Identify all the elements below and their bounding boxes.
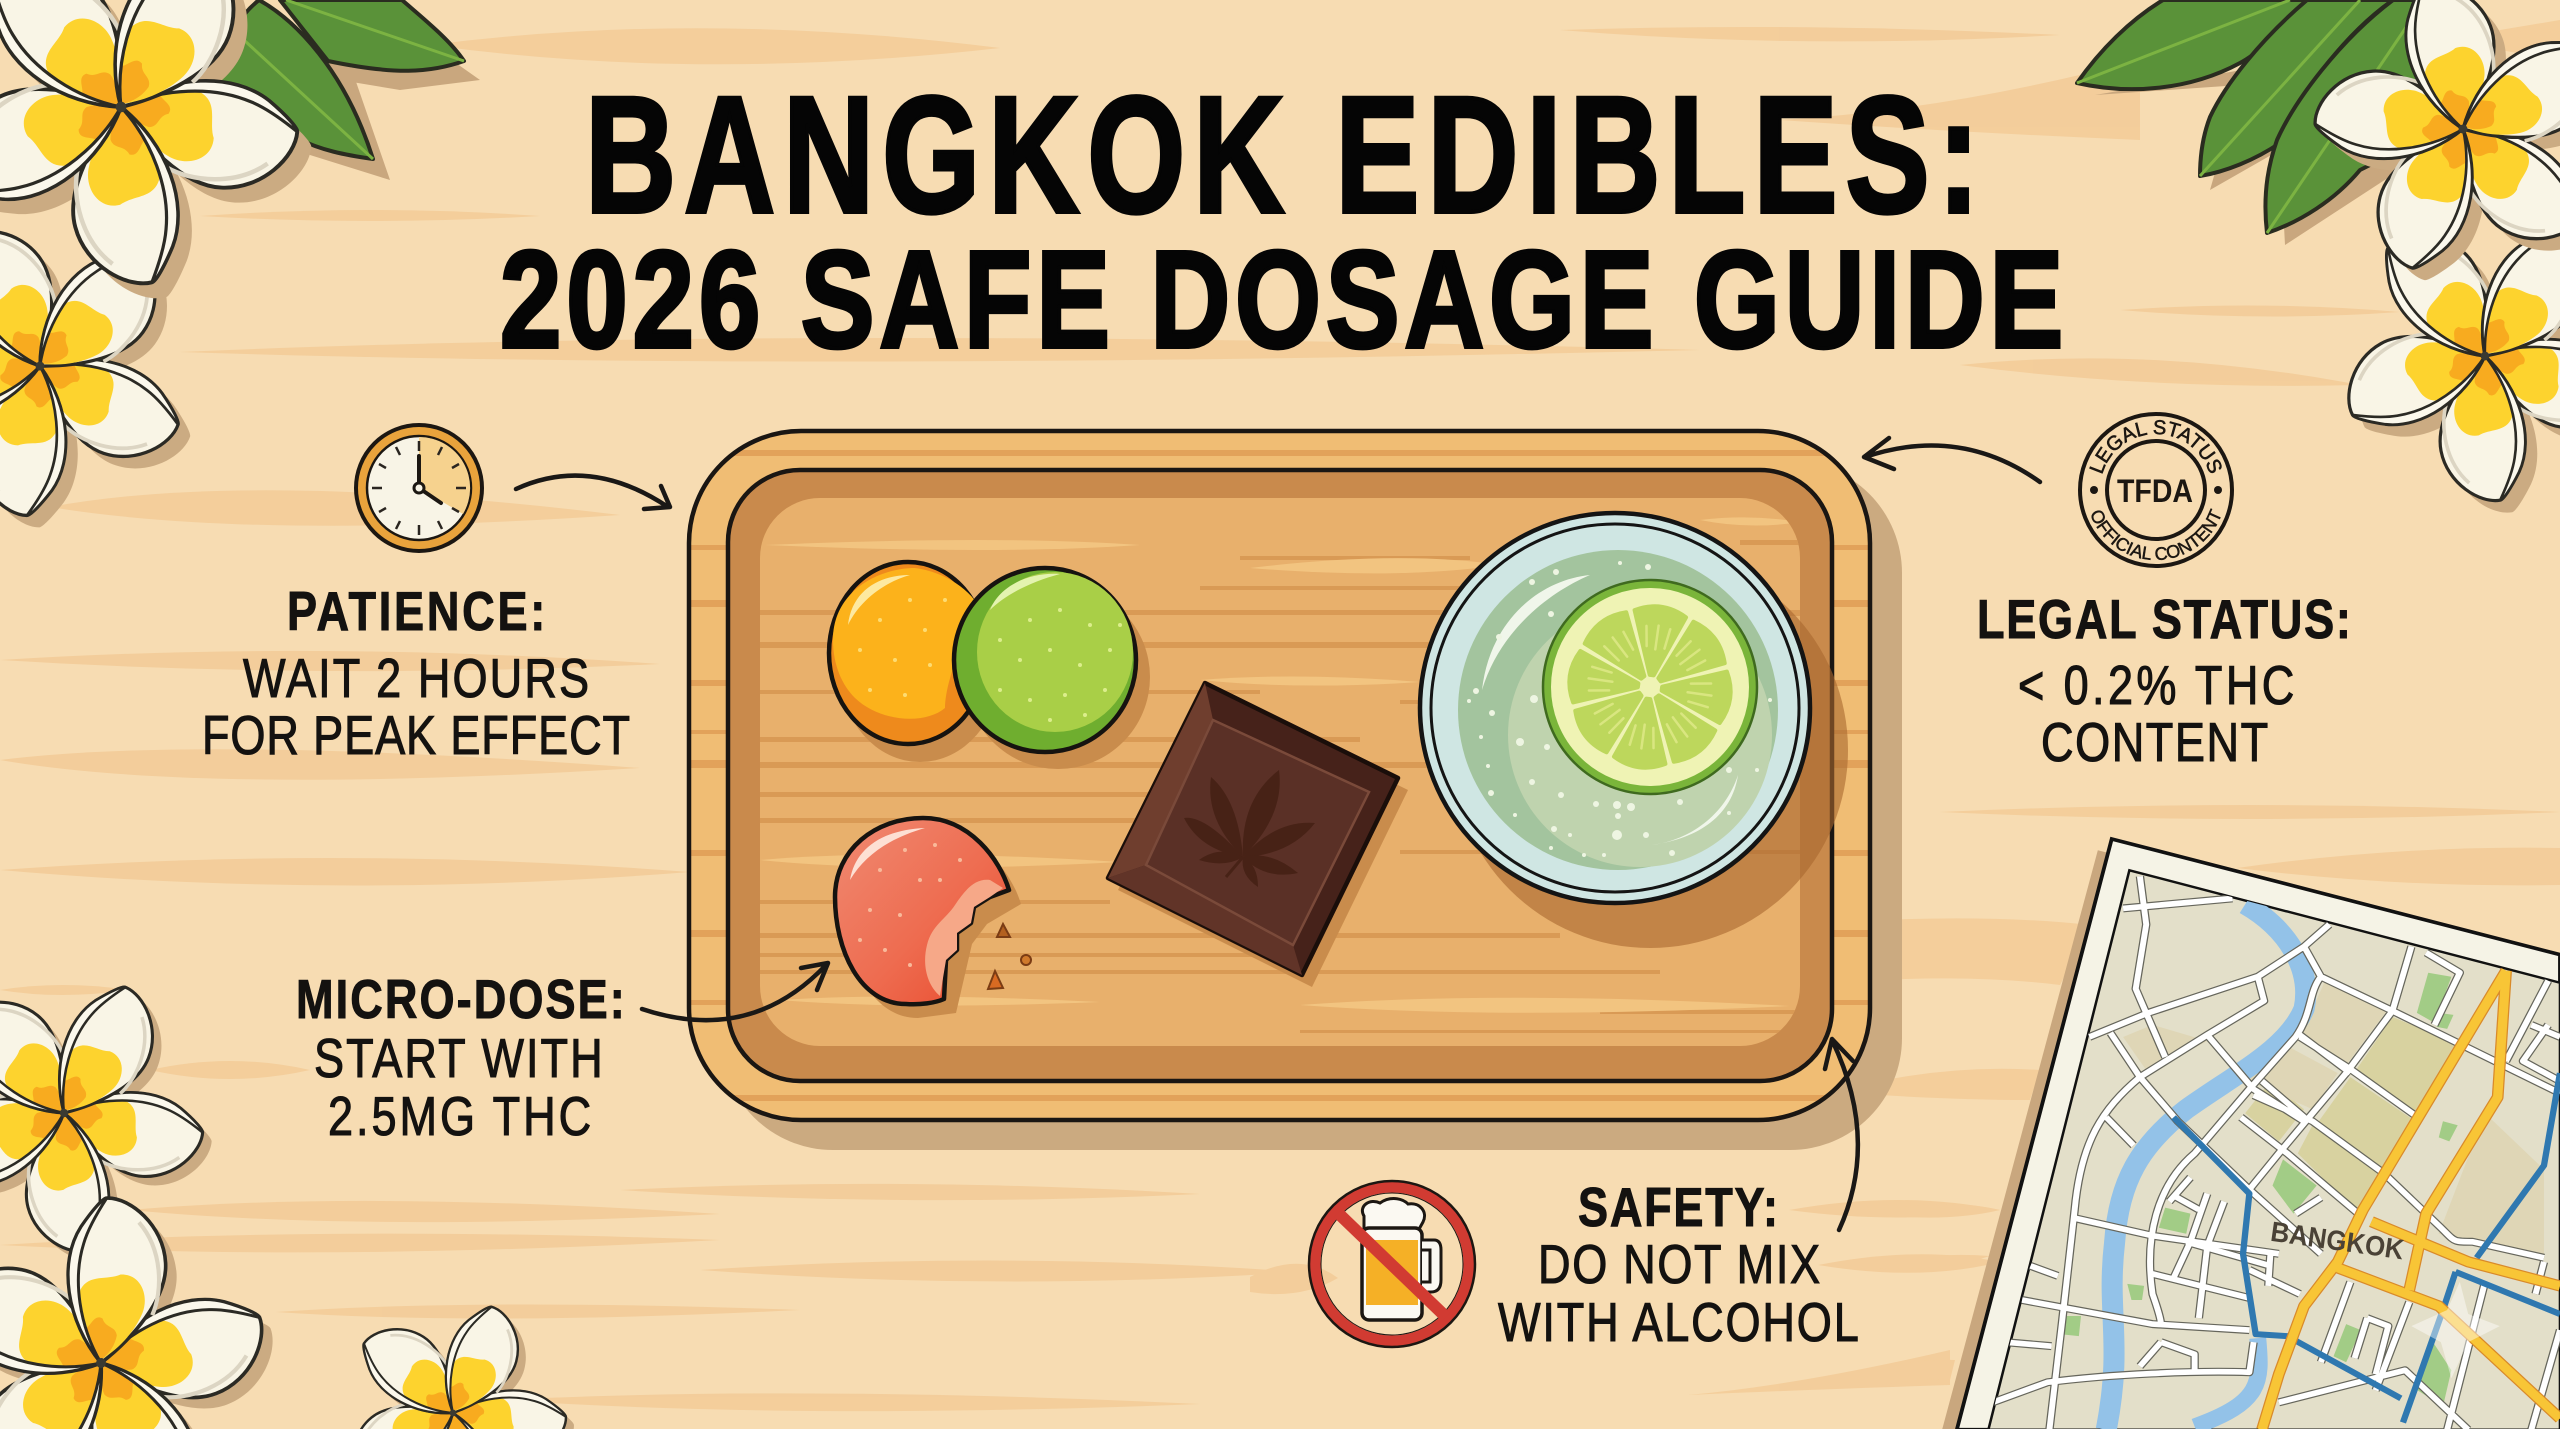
Bangkok map	[1942, 839, 2560, 1429]
text: micro-dose: 2.5MG THC	[328, 1085, 591, 1147]
text: patience: PATIENCE:	[287, 580, 545, 642]
text: safety: SAFETY:	[1578, 1176, 1778, 1238]
candy: green gummy	[954, 568, 1150, 769]
text: patience: WAIT 2 HOURS	[243, 647, 589, 709]
flower: bottom-left upper	[0, 952, 232, 1289]
text: micro-dose	[296, 968, 625, 1147]
leaves top-right	[2077, 0, 2440, 245]
arrow: legal status to tray	[1864, 438, 2040, 482]
flower: top-right upper	[2246, 0, 2560, 357]
flower: top-left upper	[0, 0, 337, 335]
arrow: safety to tray	[1825, 1039, 1858, 1230]
flower: bottom-left lower	[0, 1156, 319, 1429]
glass of lime soda	[1420, 513, 1848, 948]
icon: TFDA legal status stamp: TFDA	[2117, 473, 2193, 509]
icon: TFDA legal status stamp: LEGAL STATUS	[2089, 420, 2222, 474]
text: safety: WITH ALCOHOL	[1498, 1291, 1859, 1353]
candy: orange gummy	[829, 562, 1000, 762]
text: patience	[202, 580, 630, 766]
candy: bitten red gummy	[835, 818, 1031, 1018]
text: safety: DO NOT MIX	[1538, 1233, 1820, 1295]
text: legal status: LEGAL STATUS:	[1977, 588, 2351, 650]
Bangkok map: BANGKOK	[2269, 1216, 2406, 1265]
text: micro-dose: START WITH	[314, 1027, 603, 1089]
text: legal status: < 0.2% THC	[2018, 654, 2294, 716]
icon: TFDA legal status stamp: OFFICIAL CONTENT	[2092, 508, 2221, 560]
icon: no alcohol	[1309, 1181, 1475, 1347]
flower: top-right lower	[2307, 181, 2560, 549]
icon: clock	[356, 425, 482, 551]
text: micro-dose: MICRO-DOSE:	[296, 968, 625, 1030]
title: 2026 SAFE DOSAGE GUIDE	[500, 223, 2063, 377]
title: BANGKOK EDIBLES:	[585, 63, 1980, 248]
text: legal status: CONTENT	[2041, 711, 2268, 773]
icon: TFDA legal status stamp	[2078, 412, 2234, 568]
flower: bottom centre-left	[333, 1294, 578, 1429]
arrow: patience to tray	[516, 476, 670, 509]
leaves top-left	[210, 0, 480, 180]
wooden tray	[689, 431, 1902, 1150]
arrow: micro-dose to gummy	[642, 963, 828, 1020]
chocolate square with leaf	[1108, 683, 1408, 987]
title	[500, 63, 2063, 377]
text: patience: FOR PEAK EFFECT	[202, 704, 630, 766]
flower: top-left lower	[0, 165, 250, 584]
text: safety	[1498, 1176, 1859, 1353]
text: legal status	[1977, 588, 2351, 773]
